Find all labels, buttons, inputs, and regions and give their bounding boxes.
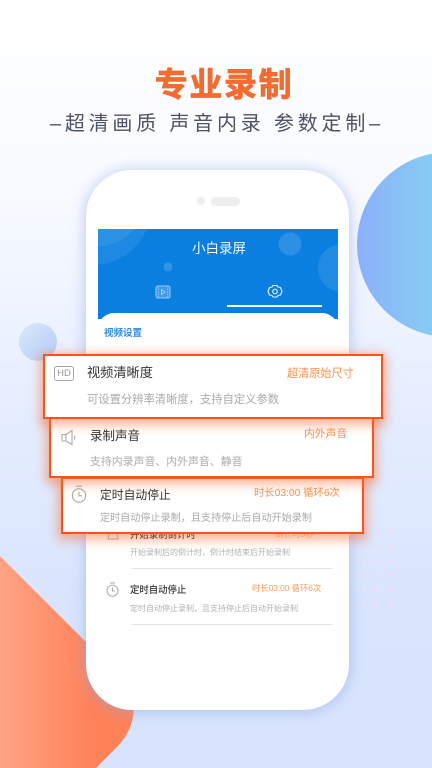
background shape: small blue circle <box>19 323 57 361</box>
card description: 可设置分辨率清晰度，支持自定义参数 <box>87 394 279 406</box>
background shape: blue circle right <box>357 152 432 337</box>
row title: 开始录制倒计时 <box>130 529 196 540</box>
highlight card: audio <box>49 416 374 478</box>
icon: video tab <box>155 285 171 299</box>
phone camera <box>197 197 205 205</box>
card title: 录制声音 <box>90 429 140 443</box>
app name: 小白录屏 <box>192 241 246 256</box>
timer row <box>106 582 321 613</box>
icon: speaker <box>61 430 76 446</box>
icon: stopwatch <box>72 486 86 503</box>
icon: stopwatch <box>106 582 118 597</box>
row value: 倒计时3秒 <box>275 529 314 539</box>
icon: HD badge <box>54 366 74 381</box>
background shape: orange rounded triangle <box>0 556 134 768</box>
dot pattern <box>361 531 394 606</box>
title: 专业录制 <box>155 66 293 103</box>
card title: 定时自动停止 <box>100 488 171 502</box>
card title: 视频清晰度 <box>87 365 153 380</box>
subtitle: –超清画质 声音内录 参数定制– <box>50 113 384 135</box>
row description: 开始录制后的倒计时，倒计时结束后开始录制 <box>130 548 290 557</box>
row description: 定时自动停止录制，且支持停止后自动开始录制 <box>130 604 298 613</box>
countdown row <box>108 529 314 557</box>
card description: 定时自动停止录制，且支持停止后自动开始录制 <box>100 513 312 524</box>
highlight card: timer <box>61 477 364 534</box>
card value: 时长03:00 循环6次 <box>254 488 340 499</box>
divider <box>132 568 332 569</box>
icon: settings gear <box>268 285 282 298</box>
row title: 定时自动停止 <box>130 584 186 595</box>
highlight card: video quality <box>43 354 383 419</box>
card value: 超清原始尺寸 <box>287 368 354 380</box>
phone speaker <box>211 197 240 206</box>
icon: HD badge: HD <box>57 368 71 379</box>
section heading: 视频设置 <box>104 328 142 339</box>
active tab underline <box>227 305 322 306</box>
card value: 内外声音 <box>304 428 347 440</box>
card description: 支持内录声音、内外声音、静音 <box>90 456 242 468</box>
header decoration circles <box>98 229 338 292</box>
divider <box>132 624 332 625</box>
app header <box>98 229 338 319</box>
row value: 时长03:00 循环6次 <box>252 583 321 593</box>
icon: timer <box>108 534 118 540</box>
phone mockup <box>86 170 349 710</box>
content sheet <box>98 313 338 653</box>
